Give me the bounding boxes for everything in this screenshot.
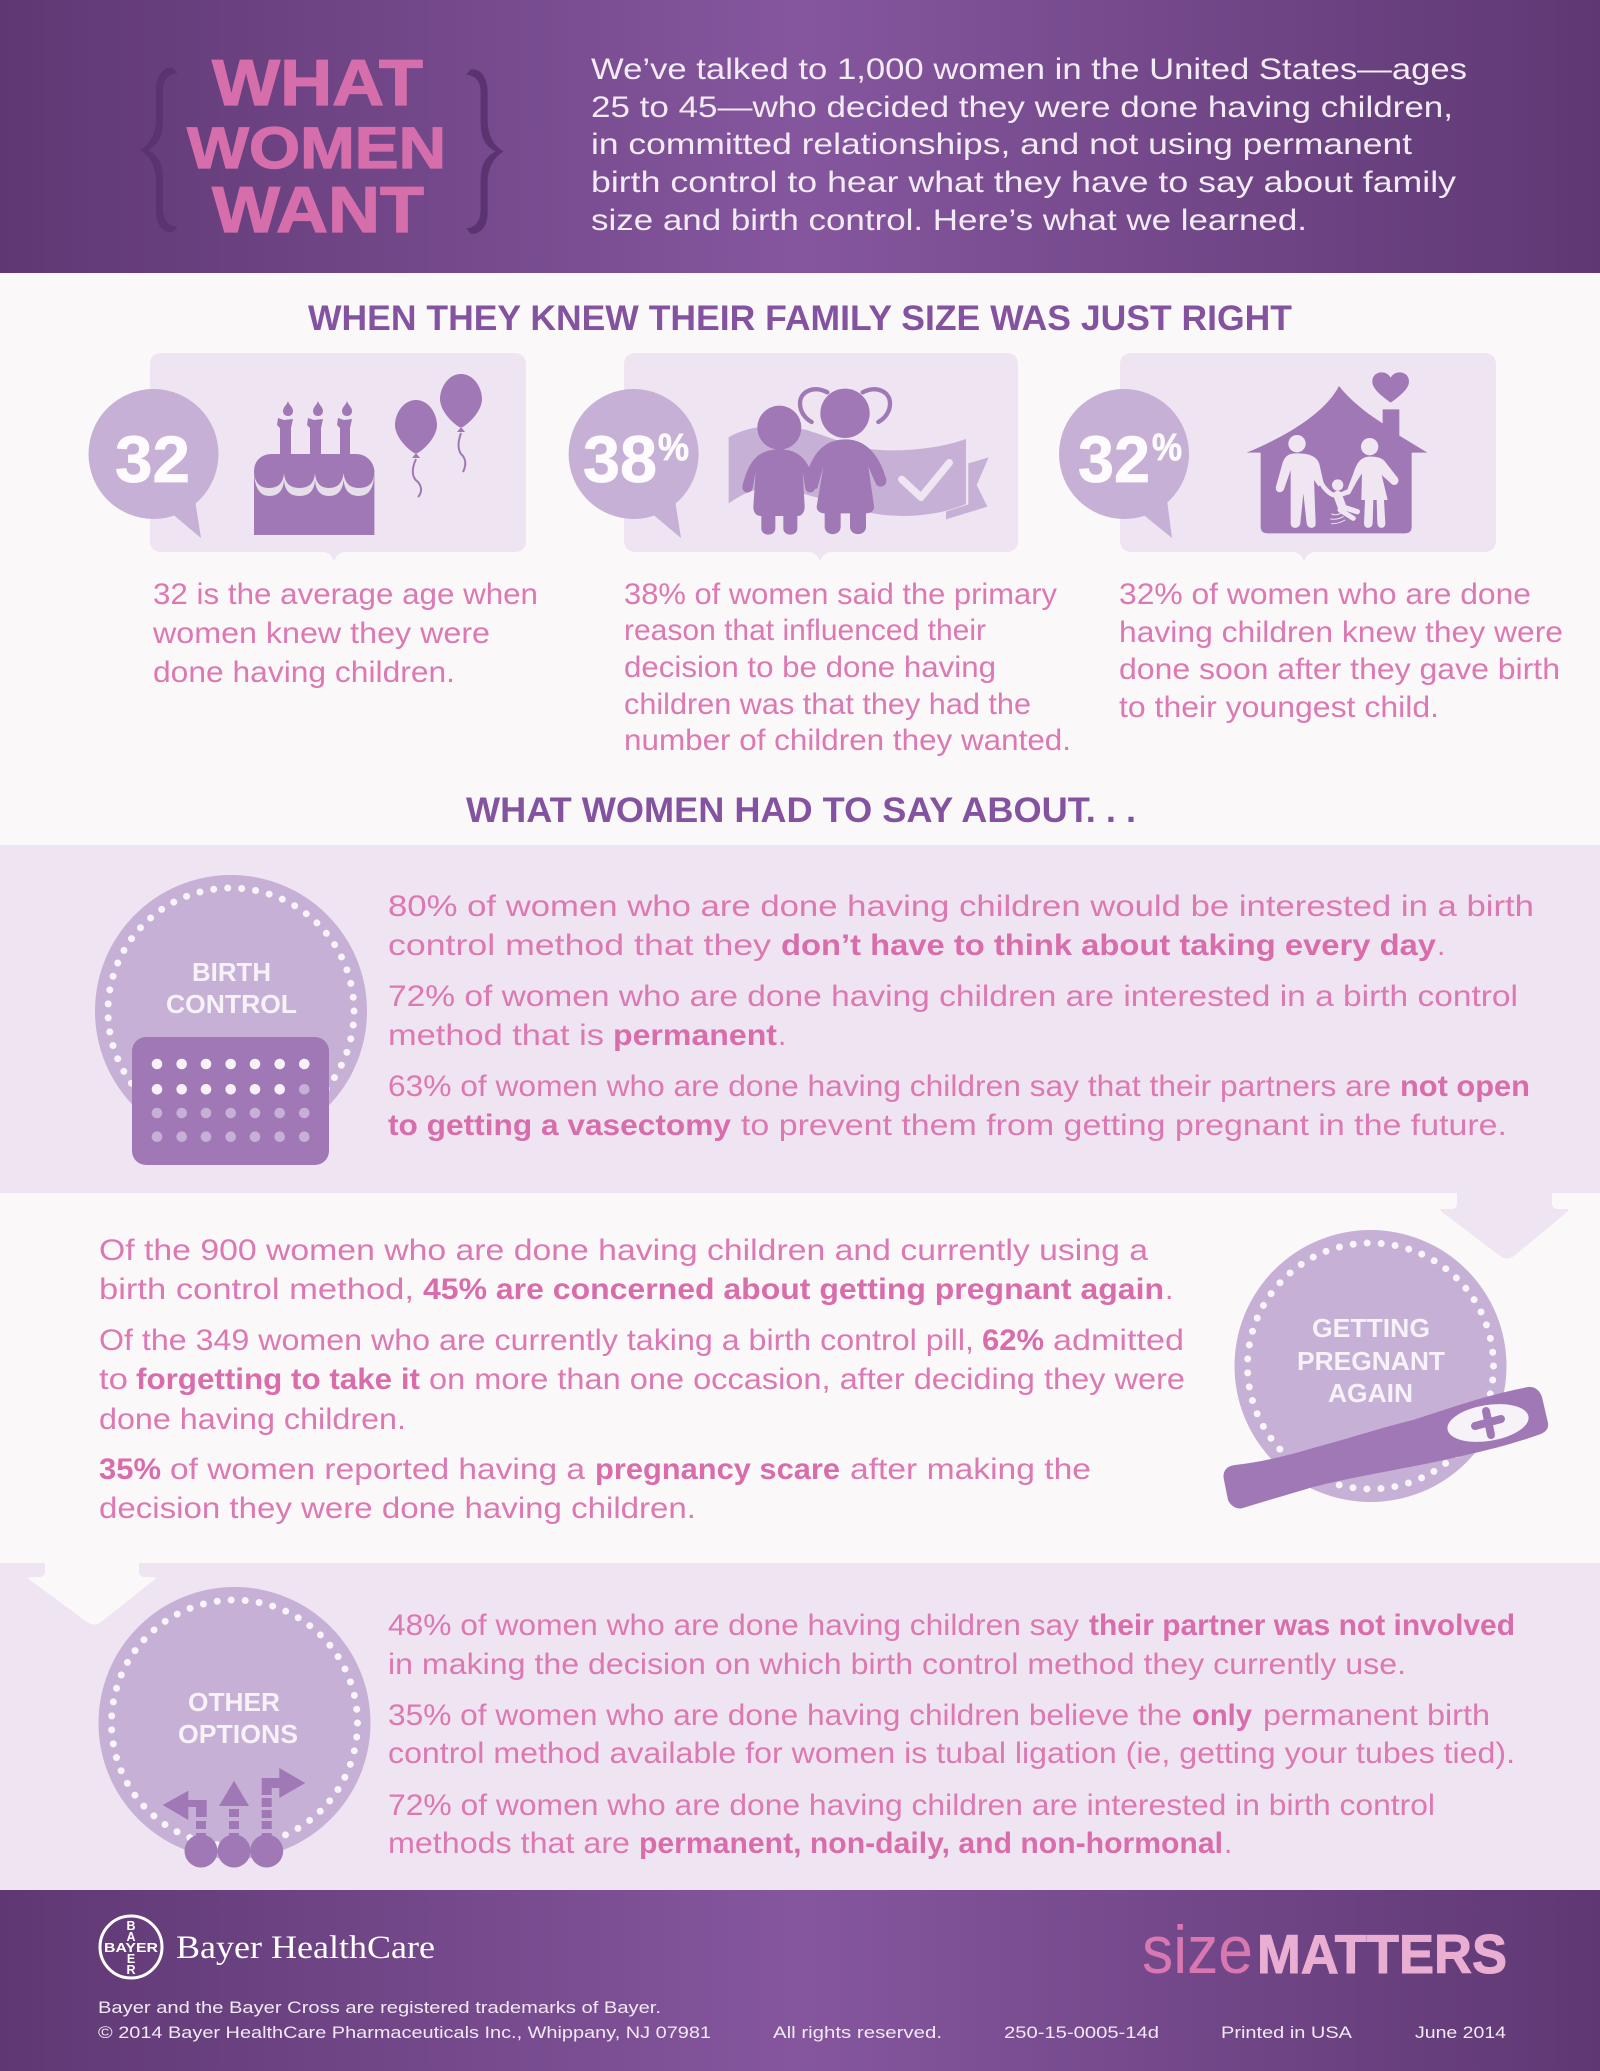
text: average age: 32 is the average age when: [153, 578, 538, 611]
arrow: section two to band three: [28, 1563, 156, 1624]
text: other options findings: 35% of women who are done having children believe the: [388, 1699, 1182, 1732]
legal text: June 2014: [1415, 2023, 1506, 2042]
text: getting pregnant findings: 62%: [982, 1324, 1044, 1357]
speech bubble: 32: [88, 389, 218, 538]
legal text: All rights reserved.: [773, 2023, 942, 2042]
logo: Bayer cross: E: [127, 1952, 135, 1966]
icon: other options badge and arrows: OTHER: [188, 1687, 280, 1717]
logo: sizeMATTERS: size: [1142, 1912, 1253, 1988]
panel: other options band: [0, 1563, 1600, 1890]
icon: two children with banner: [729, 389, 989, 535]
title: [187, 46, 446, 246]
text: getting pregnant findings: 45% are concerned about getting pregnant again: [423, 1273, 1164, 1306]
text: birth control findings: don’t have to think about taking every day: [781, 929, 1436, 962]
legal text: 250-15-0005-14d: [1004, 2023, 1159, 2042]
text: average age: [152, 578, 538, 689]
logo: Bayer cross: B: [126, 1919, 136, 1933]
intro text: We’ve talked to 1,000 women in the United States—ages: [591, 53, 1467, 86]
card background: [1120, 353, 1496, 561]
speech bubble: 38%: %: [658, 427, 689, 469]
text: getting pregnant findings: admitted: [1053, 1324, 1184, 1357]
text: getting pregnant findings: on more than one occasion, after deciding they were: [429, 1363, 1185, 1396]
icon: badge and pregnancy test: PREGNANT: [1297, 1346, 1445, 1376]
text: birth control findings: .: [1437, 929, 1445, 962]
speech bubble: 32%: [1059, 389, 1189, 538]
heading: family size: WHEN THEY KNEW THEIR FAMILY SIZE WAS JUST RIGHT: [308, 299, 1292, 338]
logo: Bayer cross: BAYER: [104, 1941, 158, 1955]
logo: sizeMATTERS: MATTERS: [1257, 1923, 1507, 1985]
text: average age: women knew they were: [152, 617, 490, 650]
text: birth control findings: 72% of women who are done having children are interested in a birth control: [388, 980, 1518, 1013]
logo text: Bayer HealthCare: Bayer HealthCare: [176, 1930, 435, 1966]
text: getting pregnant findings: Of the 900 women who are done having children and currently using a: [99, 1234, 1148, 1267]
panel: birth control band: [0, 845, 1600, 1193]
card background: [624, 353, 1018, 561]
text: other options findings: 72% of women who are done having children are interested in birth control: [388, 1789, 1435, 1822]
icon: birth control badge and pill pack: [95, 875, 367, 1165]
text: 32 percent: 32% of women who are done: [1119, 578, 1531, 611]
icon: balloons: [395, 374, 482, 497]
icon: other options badge and arrows: OPTIONS: [178, 1719, 298, 1749]
intro text: size and birth control. Here’s what we learned.: [591, 204, 1307, 237]
text: 32 percent: [1119, 578, 1563, 724]
text: getting pregnant findings: .: [1165, 1273, 1173, 1306]
legal text: Bayer and the Bayer Cross are registered trademarks of Bayer.: [98, 1998, 661, 2017]
speech bubble: 38%: [569, 389, 699, 538]
panel: 38 percent: [569, 353, 1071, 757]
icon: birthday cake: [254, 401, 374, 535]
text: getting pregnant findings: to: [99, 1363, 128, 1396]
text: birth control findings: to getting a vasectomy: [388, 1109, 731, 1142]
text: 38 percent: children was that they had the: [624, 688, 1031, 721]
text: getting pregnant findings: after making the: [850, 1453, 1091, 1486]
text: other options findings: their partner was not involved: [1089, 1609, 1515, 1642]
text: getting pregnant findings: [99, 1234, 1185, 1525]
icon: badge and pregnancy test: AGAIN: [1328, 1378, 1413, 1408]
icon: right brace: [466, 69, 504, 234]
logo: sizeMATTERS: [1142, 1912, 1507, 1988]
logo: Bayer cross: [100, 1916, 162, 1978]
text: 38 percent: [624, 578, 1071, 757]
icon: family in house: [1247, 372, 1427, 533]
arrow: band one to section two: [1440, 1193, 1569, 1258]
text: getting pregnant findings: Of the 349 women who are currently taking a birth control pill,: [99, 1324, 974, 1357]
text: 38 percent: reason that influenced their: [624, 614, 986, 647]
text: birth control findings: 80% of women who are done having children would be interested in a birth: [388, 890, 1534, 923]
text: getting pregnant findings: decision they were done having children.: [99, 1492, 696, 1525]
text: other options findings: only: [1192, 1699, 1252, 1732]
speech bubble: 38%: 38: [583, 422, 657, 496]
header banner: [0, 0, 1600, 273]
card background: [150, 353, 526, 561]
legal text: [98, 1998, 1506, 2042]
text: birth control findings: not open: [1400, 1070, 1530, 1103]
text: other options findings: control method available for women is tubal ligation (ie, getting your tubes tied).: [388, 1737, 1515, 1770]
title: WOMEN: [187, 116, 446, 181]
text: getting pregnant findings: done having children.: [99, 1403, 406, 1436]
text: 38 percent: number of children they wanted.: [624, 724, 1071, 757]
text: 32 percent: done soon after they gave birth: [1119, 653, 1560, 686]
text: other options findings: permanent, non-daily, and non-hormonal: [639, 1827, 1223, 1860]
text: other options findings: permanent birth: [1263, 1699, 1490, 1732]
text: average age: done having children.: [153, 656, 455, 689]
speech bubble: 32%: %: [1152, 427, 1182, 469]
text: 32 percent: to their youngest child.: [1119, 691, 1439, 724]
panel: average age 32: [88, 353, 538, 689]
text: birth control findings: control method that they: [388, 929, 771, 962]
icon: badge and pregnancy test: GETTING: [1312, 1313, 1430, 1343]
logo: Bayer cross: R: [126, 1963, 136, 1977]
text: birth control findings: method that is: [388, 1019, 604, 1052]
text: birth control findings: [388, 890, 1534, 1142]
text: other options findings: in making the decision on which birth control method they currently use.: [388, 1648, 1406, 1681]
icon: left brace: [140, 68, 178, 232]
title: WHAT: [212, 46, 423, 119]
panel: getting pregnant again: [99, 1230, 1548, 1525]
text: birth control findings: permanent: [613, 1019, 777, 1052]
heading: what women had to say: WHAT WOMEN HAD TO SAY ABOUT. . .: [466, 791, 1136, 830]
text: 38 percent: 38% of women said the primary: [624, 578, 1057, 611]
legal text: © 2014 Bayer HealthCare Pharmaceuticals Inc., Whippany, NJ 07981: [98, 2023, 711, 2042]
intro text: 25 to 45—who decided they were done having children,: [591, 91, 1453, 124]
text: other options findings: .: [1224, 1827, 1232, 1860]
title: WANT: [212, 173, 424, 246]
speech bubble: 32%: 32: [1078, 422, 1150, 496]
intro text: in committed relationships, and not using permanent: [591, 128, 1413, 161]
text: birth control findings: .: [778, 1019, 786, 1052]
intro text: [591, 53, 1467, 237]
text: other options findings: methods that are: [388, 1827, 630, 1860]
panel: 32 percent: [1059, 353, 1563, 724]
legal text: Printed in USA: [1221, 2023, 1353, 2042]
text: getting pregnant findings: forgetting to take it: [136, 1363, 420, 1396]
icon: badge and pregnancy test: [1223, 1230, 1548, 1508]
text: 38 percent: decision to be done having: [624, 651, 996, 684]
text: other options findings: [388, 1609, 1515, 1860]
icon: birth control badge and pill pack: BIRTH: [192, 957, 271, 987]
text: getting pregnant findings: of women reported having a: [170, 1453, 585, 1486]
intro text: birth control to hear what they have to say about family: [591, 166, 1456, 199]
text: 32 percent: having children knew they were: [1119, 616, 1563, 649]
text: birth control findings: to prevent them from getting pregnant in the future.: [741, 1109, 1507, 1142]
text: birth control findings: 63% of women who are done having children say that their partners are: [388, 1070, 1391, 1103]
footer: [0, 1890, 1600, 2071]
icon: other options badge and arrows: [98, 1587, 370, 1868]
text: other options findings: 48% of women who are done having children say: [388, 1609, 1079, 1642]
text: getting pregnant findings: birth control method,: [99, 1273, 414, 1306]
icon: birth control badge and pill pack: CONTROL: [166, 989, 297, 1019]
text: getting pregnant findings: pregnancy scare: [595, 1453, 840, 1486]
logo: Bayer cross: A: [126, 1930, 136, 1944]
speech bubble: 32: 32: [115, 422, 190, 496]
text: getting pregnant findings: 35%: [99, 1453, 161, 1486]
